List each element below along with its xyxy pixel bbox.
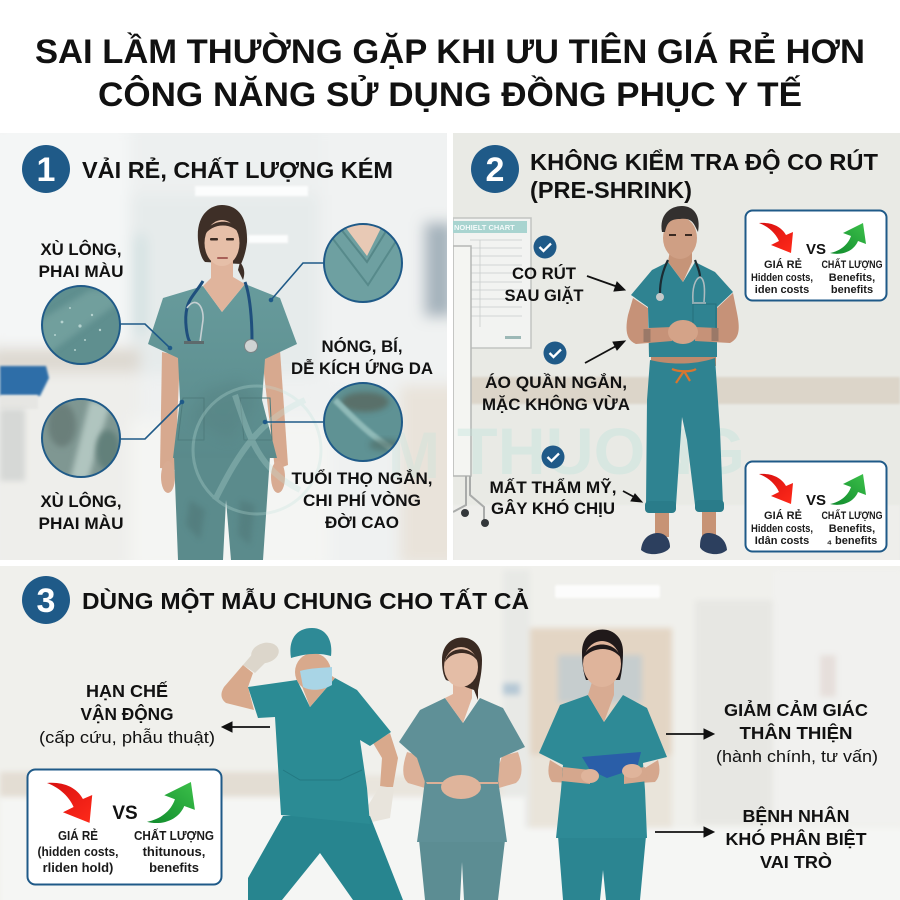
label: hard to tell roles: [726, 805, 867, 872]
arms: [403, 752, 465, 798]
wall chart: NOHIELT CHART: [454, 223, 515, 232]
label: not aesthetic: GÂY KHÓ CHỊU: [491, 499, 615, 518]
label: top left: PHAI MÀU: [38, 262, 124, 281]
neck: [588, 682, 614, 722]
arms: [160, 352, 180, 470]
comparison box: bottom: Benefits,: [829, 523, 875, 535]
detail circle: faded fabric: [40, 398, 122, 480]
badge: 2: 2: [486, 151, 504, 189]
label: short lifespan: TUỔI THỌ NGẮN,: [292, 469, 432, 488]
arrow: to clipboard woman: [666, 729, 714, 739]
drawstring: [672, 369, 696, 383]
comparison box: top: [746, 210, 886, 300]
pants: [248, 816, 403, 900]
comparison box: panel 3: [28, 770, 222, 884]
arms: [548, 760, 590, 784]
label: bottom left: XÙ LÔNG,: [40, 492, 122, 511]
scrub top: [248, 678, 391, 824]
title: [35, 33, 865, 114]
face: [583, 641, 621, 687]
watermark text: THUONG: [457, 414, 745, 488]
comparison box: panel 3: (hidden costs,: [38, 844, 118, 859]
arms and hands: [627, 298, 672, 344]
label: less friendly: THÂN THIỆN: [740, 722, 852, 743]
label: top left: [40, 240, 122, 277]
panel: không kiểm tra độ co rút: [453, 133, 900, 565]
label: short lifespan: [292, 469, 432, 532]
scrub top: [539, 695, 667, 838]
comparison box: top: benefits: [831, 284, 873, 296]
label: less friendly: [716, 699, 878, 766]
label: restricts movement: VẬN ĐỘNG: [80, 703, 174, 724]
comparison box: bottom: Hidden costs,: [751, 523, 813, 535]
clinic room background: [453, 133, 900, 565]
label: clothes too short: [482, 373, 630, 414]
raised arm: [221, 665, 254, 710]
label: clothes too short: MẶC KHÔNG VỪA: [482, 395, 630, 414]
label: short lifespan: ĐỜI CAO: [325, 513, 399, 532]
comparison box: bottom: Idân costs: [755, 535, 809, 547]
heading: không kiểm tra: [530, 148, 878, 203]
label: less friendly: GIẢM CẢM GIÁC: [724, 699, 868, 720]
label: hard to tell roles: VAI TRÒ: [760, 851, 832, 872]
wall chart: [453, 218, 531, 348]
label: bottom left: [40, 492, 122, 529]
mask: [300, 667, 332, 690]
comparison box: top: Benefits,: [829, 272, 875, 284]
hair: [582, 630, 623, 680]
heading: vải rẻ: VẢI RẺ, CHẤT LƯỢNG KÉM: [82, 155, 393, 183]
detail circle: collar: [322, 222, 404, 304]
arrow: to cuff: [623, 491, 642, 502]
heading: dùng một mẫu chung: DÙNG MỘT MẪU CHUNG CHO TẤT CẢ: [82, 586, 529, 614]
comparison box: top: CHẤT LƯỢNG: [822, 258, 882, 271]
title: CÔNG NĂNG SỬ DỤNG ĐỒNG PHỤC Y TẾ: [98, 75, 802, 114]
label: hard to tell roles: BỆNH NHÂN: [742, 805, 850, 826]
face: [204, 220, 240, 266]
label: hot, irritating: DỄ KÍCH ỨNG DA: [291, 359, 433, 378]
comparison box: panel 3: VS: [112, 803, 138, 824]
label: not aesthetic: MẤT THẨM MỸ,: [490, 477, 616, 497]
glove: lowered hand: [364, 786, 394, 822]
comparison box: top: Hidden costs,: [751, 272, 813, 284]
label: restricts movement: (cấp cứu, phẫu thuật): [39, 728, 215, 747]
badge: 3: [22, 576, 70, 624]
watermark logo: M: [388, 418, 440, 492]
label: shrinks after washing: SAU GIẶT: [504, 286, 584, 305]
corridor background: [0, 566, 900, 900]
comparison box: bottom: GIÁ RẺ: [764, 509, 802, 522]
label: not aesthetic: [490, 477, 616, 518]
arrow: to waist: [585, 341, 625, 363]
label: restricts movement: HẠN CHẾ: [86, 680, 168, 701]
stethoscope: [660, 260, 700, 293]
person: man in shrunken scrubs: [627, 206, 739, 554]
label: short lifespan: CHI PHÍ VÒNG: [303, 491, 421, 510]
hair: [198, 205, 247, 280]
comparison box: top: GIÁ RẺ: [764, 258, 802, 271]
comparison box: panel 3: GIÁ RẺ: [58, 828, 98, 843]
check: not aesthetic: [542, 446, 564, 468]
ankles: [655, 511, 669, 537]
label: less friendly: (hành chính, tư vấn): [716, 747, 878, 766]
label: bottom left: PHAI MÀU: [38, 514, 124, 533]
badge: 3: 3: [37, 582, 55, 620]
comparison box: panel 3: CHẤT LƯỢNG: [134, 828, 214, 843]
label: clothes too short: ÁO QUẦN NGẮN,: [485, 373, 627, 392]
comparison box: bottom: [746, 462, 886, 552]
check: clothes too short: [544, 342, 566, 364]
label: hard to tell roles: KHÓ PHÂN BIỆT: [726, 828, 867, 849]
title: SAI LẦM THƯỜNG GẶP KHI ƯU TIÊN GIÁ RẺ HƠN: [35, 33, 865, 71]
neck: [298, 676, 335, 707]
panel: dùng một mẫu chung: [0, 566, 900, 900]
arrow: to role label: [655, 827, 714, 837]
pants: [646, 358, 723, 505]
hair: [442, 638, 482, 700]
hands: [441, 775, 481, 799]
rolled cuffs: [645, 501, 676, 513]
panel: vải rẻ, chất lượng kém: [0, 125, 460, 572]
glove: raised hand: [243, 640, 281, 673]
label: top left: XÙ LÔNG,: [40, 240, 122, 259]
heading: không kiểm tra: (PRE-SHRINK): [530, 177, 692, 203]
neck and head: [668, 250, 692, 282]
neck: [445, 680, 472, 723]
check: shrinks after washing: [534, 236, 556, 258]
arrow: to sleeve: [587, 276, 625, 291]
person: surgeon in action pose: [221, 628, 403, 900]
detail circle: pilling fabric: [40, 285, 122, 367]
watermark logo: [193, 386, 440, 514]
connector lines: [120, 263, 323, 439]
neck: [203, 258, 245, 312]
surgical cap: [290, 628, 331, 658]
head: [295, 653, 331, 691]
badge: 1: [22, 145, 70, 193]
clogs: [641, 533, 670, 554]
badge: 1: 1: [37, 151, 55, 189]
label: hot, irritating: NÓNG, BÍ,: [322, 337, 402, 356]
clipboard: [582, 752, 641, 778]
pants: [558, 836, 646, 900]
hospital corridor background: [0, 125, 460, 572]
heading: không kiểm tra: KHÔNG KIỂM TRA ĐỘ CO RÚT: [530, 148, 878, 175]
pants: [174, 456, 270, 560]
face: [444, 647, 478, 687]
person: woman standing: [399, 638, 525, 900]
scrub top: [148, 284, 297, 458]
detail circle: stained fabric: [322, 381, 404, 463]
belly: [651, 357, 716, 366]
comparison box: top: iden costs: [755, 284, 809, 296]
label: restricts movement: [39, 680, 215, 747]
badge: 2: [471, 145, 519, 193]
scrub top: [399, 698, 525, 782]
label: shrinks after washing: CO RÚT: [512, 264, 577, 283]
stethoscope: [186, 281, 252, 342]
lowered arm: [373, 733, 398, 787]
arrow: to surgeon: [222, 722, 270, 732]
scrub top: [631, 262, 733, 357]
comparison box: panel 3: rliden hold): [43, 860, 113, 875]
privacy screen: [453, 246, 489, 527]
label: hot, irritating: [292, 337, 432, 374]
comparison box: top: VS: [806, 241, 826, 258]
comparison box: bottom: ₄ benefits: [827, 535, 877, 547]
comparison box: bottom: CHẤT LƯỢNG: [822, 509, 882, 522]
comparison box: panel 3: thitunous,: [143, 844, 205, 859]
comparison box: panel 3: benefits: [149, 860, 199, 875]
person: woman in faded scrubs: [148, 205, 297, 560]
comparison box: bottom: VS: [806, 492, 826, 509]
label: shrinks after washing: [504, 264, 584, 305]
person: woman with clipboard: [539, 630, 667, 900]
pants: [419, 840, 505, 900]
